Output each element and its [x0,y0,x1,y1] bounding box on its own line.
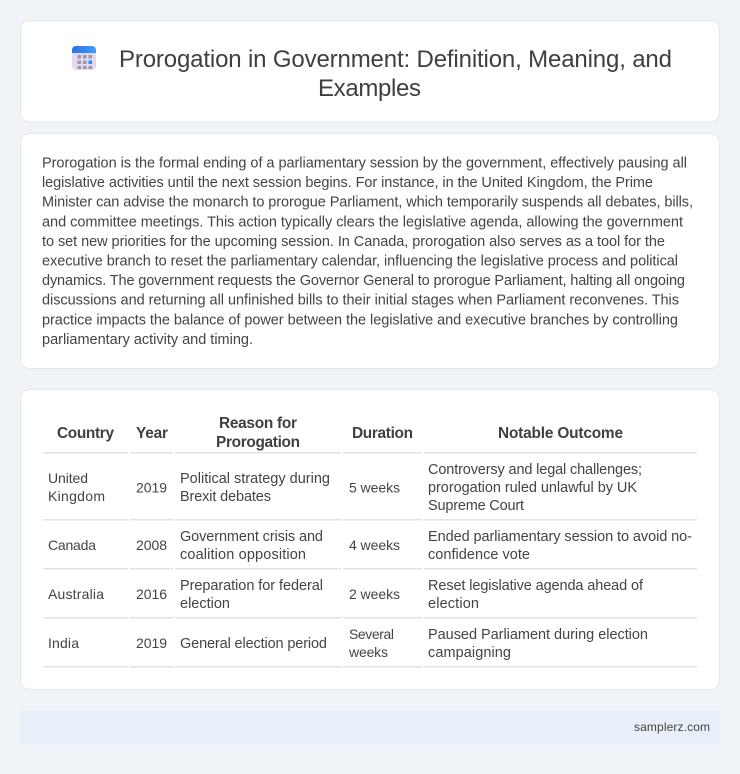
table row: Canada: confidence vote [428,547,530,563]
table row: Australia: 2 weeks [349,586,400,602]
table row: India: 2019 [136,635,167,651]
text block: definition paragraph: and committee meetings. This action typically clears the legislative agenda, allowing the government [42,214,683,230]
text block: definition paragraph: Minister can advise the monarch to prorogue Parliament, which temporarily suspends all debates, bills, [42,195,693,211]
table header row: Duration [352,425,413,442]
panel: definition text [20,134,720,368]
footer [20,710,720,744]
table row: India: Several [349,626,394,642]
table row: Australia: Reset legislative agenda ahead of [428,578,644,594]
icon: calendar [72,46,96,70]
table row: Australia [43,578,697,618]
table row: United Kingdom: Supreme Court [428,498,524,514]
text block: definition paragraph: executive branch to reset the parliamentary calendar, influencing the legislative process and political [42,254,678,270]
table row: United Kingdom: United [48,470,88,486]
table row: Australia: Australia [48,586,104,602]
title [119,46,672,102]
text block: definition paragraph: parliamentary activity and timing. [42,332,253,348]
table header row: Reason for [219,415,297,432]
text block: definition paragraph: Prorogation is the formal ending of a parliamentary session by the government, effectively pausing all [42,156,687,172]
table row: India: General election period [180,636,327,652]
table header row [43,415,697,454]
table row: United Kingdom: Controversy and legal challenges; [428,462,642,478]
text block: definition paragraph: discussions and returning all unfinished bills to their initial stages when Parliament reconvenes. This [42,293,679,309]
table row: United Kingdom: Kingdom [48,488,105,504]
table row: India: Paused Parliament during election [428,627,648,643]
table header row: Year [136,425,168,442]
footer: samplerz.com [634,720,710,734]
table header row: Prorogation [216,434,300,451]
panel: title header [20,20,720,122]
table row: United Kingdom: prorogation ruled unlawful by UK [428,480,637,496]
text block: definition paragraph: practice impacts the balance of power between the legislative and executive branches by controlling [42,312,678,328]
panel: data table [20,390,720,690]
table row: United Kingdom [43,462,697,520]
text block: definition paragraph [42,156,693,348]
table row: Australia: election [180,596,230,612]
table row: Australia: election [428,596,479,612]
text block: definition paragraph: to set new priorities for the upcoming session. In Canada, prorogation also serves as a tool for the [42,234,665,250]
table row: United Kingdom: 2019 [136,480,167,496]
title: Examples [318,75,421,102]
table row: United Kingdom: Brexit debates [180,489,271,505]
table header row: Country [57,425,114,442]
text block: definition paragraph: legislative activities until the next session begins. For instance, in the United Kingdom, the Prime [42,175,653,191]
title: Prorogation in Government: Definition, Meaning, and [119,46,672,73]
table row: Australia: Preparation for federal [180,578,323,594]
table row: Canada: Canada [48,537,96,553]
table row: India: campaigning [428,645,511,661]
table row: India: India [48,635,79,651]
text block: definition paragraph: dynamics. The government requests the Governor General to prorogue Parliament, halting all ongoing [42,273,685,289]
table row: United Kingdom: 5 weeks [349,480,400,496]
table row: Canada [43,529,697,570]
table row: Canada: Ended parliamentary session to avoid no- [428,529,692,545]
table row: India: weeks [348,644,388,660]
table row: United Kingdom: Political strategy during [180,471,330,487]
table row: Canada: 4 weeks [349,537,400,553]
table row: India [43,626,697,668]
table row: Canada: coalition opposition [180,547,306,563]
table row: Canada: 2008 [136,537,167,553]
table row: Canada: Government crisis and [180,529,323,545]
table header row: Notable Outcome [498,425,623,442]
table row: Australia: 2016 [136,586,167,602]
